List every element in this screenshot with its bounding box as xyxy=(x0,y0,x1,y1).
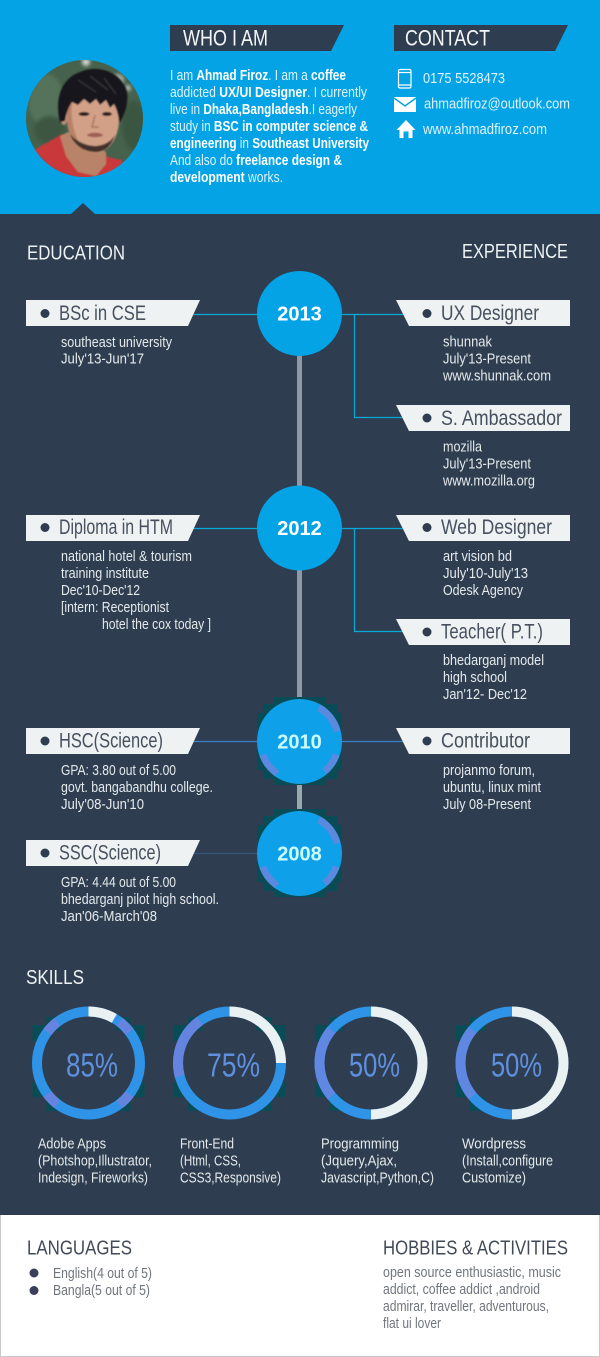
entry: Contributor: ubuntu, linux mint xyxy=(443,780,541,796)
entry: S. Ambassador: S. Ambassador xyxy=(441,407,562,430)
icon: phone xyxy=(398,70,411,88)
entry: S. Ambassador: mozilla xyxy=(443,440,483,456)
entry: SSC: SSC(Science) xyxy=(59,842,161,864)
entry: Diploma in HTM: training institute xyxy=(61,566,149,582)
heading: education: EDUCATION xyxy=(27,242,125,264)
entry: SSC: GPA: 4.44 out of 5.00 xyxy=(61,875,176,891)
skill: programming 50%: 50% xyxy=(349,1048,400,1084)
heading: experience: EXPERIENCE xyxy=(462,240,568,263)
entry: HSC: July'08-Jun'10 xyxy=(61,797,144,813)
year node: 2008 xyxy=(257,809,342,897)
year node: 2012: 2012 xyxy=(277,518,322,540)
skill: programming 50%: Javascript,Python,C) xyxy=(321,1170,434,1186)
entry: BSc in CSE xyxy=(26,300,200,368)
year node: 2013: 2013 xyxy=(277,304,322,326)
skill: wordpress 50% xyxy=(456,1012,564,1186)
text: about paragraph: study in BSC in computer science & xyxy=(170,119,368,135)
entry: Diploma in HTM: Diploma in HTM xyxy=(59,516,173,539)
heading: who i am: WHO I AM xyxy=(183,26,268,50)
entry: BSc in CSE: July'13-Jun'17 xyxy=(61,352,144,368)
entry: BSc in CSE: southeast university xyxy=(61,335,173,351)
entry: Diploma in HTM: [intern: Receptionist xyxy=(61,600,169,616)
icon: header pointer xyxy=(71,203,95,214)
skill: front-end 75%: Front-End xyxy=(180,1136,234,1152)
skill: front-end 75% xyxy=(174,1012,286,1186)
entry: UX Designer: www.shunnak.com xyxy=(442,368,551,384)
entry: Diploma in HTM: Dec'10-Dec'12 xyxy=(61,583,140,599)
entry: SSC xyxy=(26,840,219,925)
entry: Diploma in HTM: hotel the cox today ] xyxy=(102,617,211,633)
entry: Contributor xyxy=(396,728,570,813)
connectors: 2010 xyxy=(193,740,403,742)
panel: header xyxy=(0,0,600,214)
skill: wordpress 50%: Wordpress xyxy=(462,1136,526,1152)
skill: wordpress 50%: (Install,configure xyxy=(462,1154,553,1170)
entry: S. Ambassador: www.mozilla.org xyxy=(442,474,535,490)
entry: BSc in CSE: BSc in CSE xyxy=(59,302,146,325)
entry: Teacher: Jan'12- Dec'12 xyxy=(443,687,527,703)
heading: who i am xyxy=(170,25,344,51)
text: about paragraph: engineering in Southeast University xyxy=(170,136,369,152)
text: website: www.ahmadfiroz.com xyxy=(422,122,547,138)
year node: 2013 xyxy=(257,271,342,356)
panel: footer xyxy=(0,1215,600,1357)
skill: adobe apps 85%: Adobe Apps xyxy=(38,1136,106,1152)
entry: Contributor: Contributor xyxy=(441,730,530,752)
entry: HSC: HSC(Science) xyxy=(59,730,163,752)
entry: HSC xyxy=(26,728,213,813)
text: hobbies list: open source enthusiastic, music xyxy=(383,1265,561,1281)
entry: Web Designer: Odesk Agency xyxy=(443,583,524,599)
skill: front-end 75%: (Html, CSS, xyxy=(180,1154,241,1170)
text: about paragraph: And also do freelance design & xyxy=(170,153,342,169)
photo: portrait xyxy=(26,58,146,182)
year node: 2012 xyxy=(257,486,342,570)
text: phone number: 0175 5528473 xyxy=(423,71,505,87)
skill: adobe apps 85%: Indesign, Fireworks) xyxy=(38,1170,148,1186)
skill: wordpress 50%: 50% xyxy=(491,1048,542,1084)
list: languages: Bangla(5 out of 5) xyxy=(53,1283,150,1299)
connectors: 2013 xyxy=(193,314,403,418)
connectors: 2012 xyxy=(193,528,403,632)
year node: 2010: 2010 xyxy=(277,732,322,754)
text: about paragraph: addicted UX/UI Designer. I currently xyxy=(170,85,368,101)
skill: adobe apps 85%: 85% xyxy=(66,1048,118,1084)
skill: front-end 75%: CSS3,Responsive) xyxy=(180,1170,281,1186)
skill: front-end 75%: 75% xyxy=(207,1048,260,1084)
text: about paragraph xyxy=(170,68,369,186)
icon: envelope xyxy=(394,97,416,112)
entry: UX Designer: UX Designer xyxy=(441,302,539,325)
entry: Contributor: July 08-Present xyxy=(443,797,531,813)
connector: 2008 xyxy=(193,852,257,854)
text: email: ahmadfiroz@outlook.com xyxy=(424,96,570,112)
entry: Diploma in HTM: national hotel & tourism xyxy=(61,549,192,565)
skill: programming 50%: Programming xyxy=(321,1136,399,1152)
heading: languages: LANGUAGES xyxy=(27,1236,132,1260)
text: hobbies list: flat ui lover xyxy=(383,1316,441,1332)
text: about paragraph: development works. xyxy=(170,170,283,186)
entry: Teacher xyxy=(396,619,570,703)
text: hobbies list: admirar, traveller, adventurous, xyxy=(383,1299,549,1315)
skill: adobe apps 85% xyxy=(32,1012,152,1186)
entry: SSC: Jan'06-March'08 xyxy=(61,909,157,925)
heading: contact: CONTACT xyxy=(405,26,490,50)
skill: programming 50%: (Jquery,Ajax, xyxy=(321,1154,397,1170)
entry: UX Designer: shunnak xyxy=(443,334,493,350)
entry: Teacher: bhedarganj model xyxy=(443,653,544,669)
entry: S. Ambassador xyxy=(396,405,570,490)
entry: Web Designer: July'10-July'13 xyxy=(443,566,528,582)
entry: Teacher: high school xyxy=(443,670,507,686)
year node: 2010 xyxy=(257,697,342,785)
list: languages: English(4 out of 5) xyxy=(53,1266,152,1282)
entry: Contributor: projanmo forum, xyxy=(443,763,535,779)
entry: Diploma in HTM xyxy=(26,515,211,633)
skill: wordpress 50%: Customize) xyxy=(462,1170,526,1186)
entry: S. Ambassador: July'13-Present xyxy=(443,456,531,472)
text: about paragraph: I am Ahmad Firoz. I am a coffee xyxy=(170,68,346,84)
entry: UX Designer: July'13-Present xyxy=(443,352,531,368)
entry: Web Designer: Web Designer xyxy=(441,516,552,539)
entry: HSC: govt. bangabandhu college. xyxy=(61,780,213,796)
list: languages xyxy=(30,1266,152,1299)
timeline spine xyxy=(297,350,302,815)
entry: Web Designer: art vision bd xyxy=(443,549,512,565)
icon: home xyxy=(396,120,416,138)
text: hobbies list: addict, coffee addict ,android xyxy=(383,1282,540,1298)
entry: Web Designer xyxy=(396,515,570,599)
text: about paragraph: live in Dhaka,Bangladesh.I eagerly xyxy=(170,102,358,118)
entry: HSC: GPA: 3.80 out of 5.00 xyxy=(61,763,176,779)
skill: adobe apps 85%: (Photshop,Illustrator, xyxy=(38,1154,152,1170)
skill: programming 50% xyxy=(315,1012,434,1186)
text: hobbies list xyxy=(383,1265,561,1332)
heading: skills: SKILLS xyxy=(26,966,84,989)
entry: UX Designer xyxy=(396,300,570,384)
year node: 2008: 2008 xyxy=(277,844,322,866)
entry: Teacher: Teacher( P.T.) xyxy=(441,620,543,644)
entry: SSC: bhedarganj pilot high school. xyxy=(61,892,219,908)
heading: contact xyxy=(394,25,568,51)
